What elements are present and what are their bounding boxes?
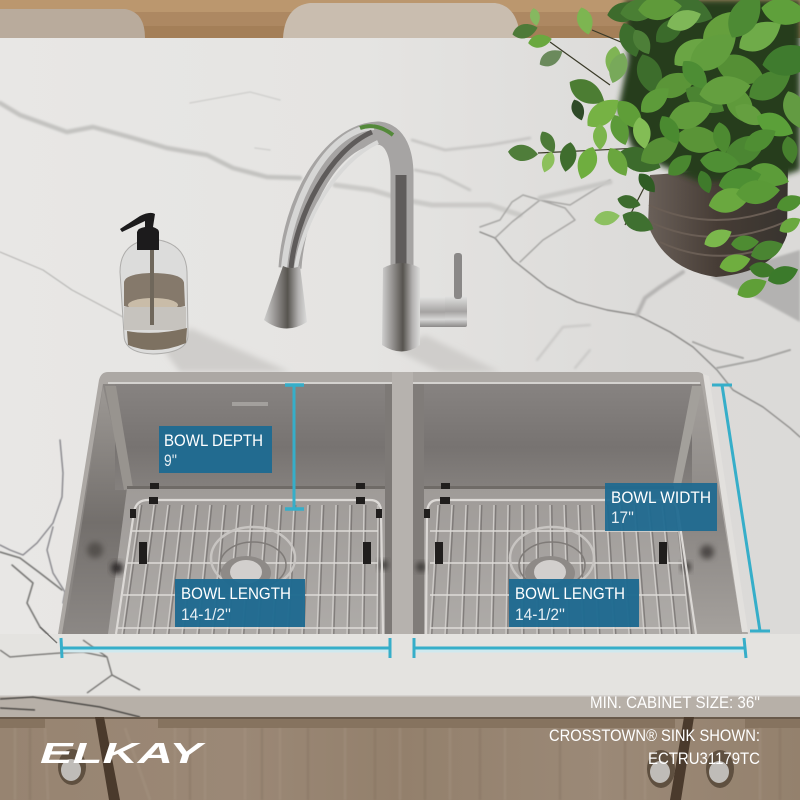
faucet base: [382, 263, 420, 352]
faucet spray head: [264, 266, 307, 329]
left bowl: [62, 383, 392, 634]
faucet spout: [284, 126, 402, 275]
foliage dark mass: [618, 0, 800, 182]
logo: Elkay: ELKAY: [40, 738, 206, 770]
dimension: right bowl length line: [414, 638, 746, 658]
caption: minimum cabinet size: MIN. CABINET SIZE: 36'': [590, 693, 760, 712]
left rack clips: [130, 483, 382, 564]
marble veins: [0, 92, 800, 643]
left strainer: [211, 527, 295, 590]
label: left bowl length: [175, 579, 305, 627]
right strainer: [510, 527, 594, 590]
plant pot shadow: [710, 250, 800, 322]
chair right: [283, 3, 520, 38]
countertop front edge: [0, 695, 800, 717]
plant leaves: [507, 0, 800, 303]
right wire rack: [426, 500, 696, 634]
label: bowl depth: 9'': [164, 452, 177, 470]
right rack clips: [424, 483, 667, 564]
chair left: [0, 9, 145, 38]
dimension: bowl width line: [712, 385, 770, 631]
soap and faucet shadows: [165, 328, 500, 372]
caption: sink model: [549, 726, 760, 768]
cabinet: [0, 717, 800, 800]
background: wood table behind counter: [0, 0, 800, 40]
left bowl walls: [62, 383, 392, 634]
label: bowl depth: BOWL DEPTH: [164, 432, 263, 450]
label: left bowl length: 14-1/2'': [181, 606, 231, 624]
soap dispenser: [120, 213, 188, 354]
label: bowl width: BOWL WIDTH: [611, 489, 711, 507]
plant stems: [538, 30, 648, 225]
cabinet knobs: [58, 749, 734, 788]
right bowl walls: [413, 383, 742, 634]
label: right bowl length: BOWL LENGTH: [515, 585, 625, 603]
plant pot: [648, 165, 788, 277]
faucet handle: [412, 253, 467, 327]
label: bowl width: [605, 483, 717, 531]
faucet: [264, 126, 467, 352]
plant foliage: [507, 0, 800, 303]
label: right bowl length: [509, 579, 639, 627]
center divider: [392, 372, 413, 634]
cabinet door gaps: [95, 717, 694, 800]
left wire rack: [116, 500, 383, 634]
sink: [58, 372, 748, 634]
right rim highlight: [703, 374, 748, 632]
right bowl: [413, 383, 742, 634]
caption: sink model: CROSSTOWN® SINK SHOWN:: [549, 726, 760, 745]
dimension: bowl depth line: [285, 385, 304, 509]
caption: sink model: ECTRU31179TC: [648, 749, 760, 768]
sink rim: [58, 372, 748, 634]
front countertop strip: [0, 627, 800, 696]
label: left bowl length: BOWL LENGTH: [181, 585, 291, 603]
label: bowl width: 17'': [611, 509, 634, 527]
label: bowl depth: [159, 426, 272, 473]
dimension: left bowl length line: [61, 638, 390, 658]
label: right bowl length: 14-1/2'': [515, 606, 565, 624]
soap pump: [120, 213, 159, 250]
